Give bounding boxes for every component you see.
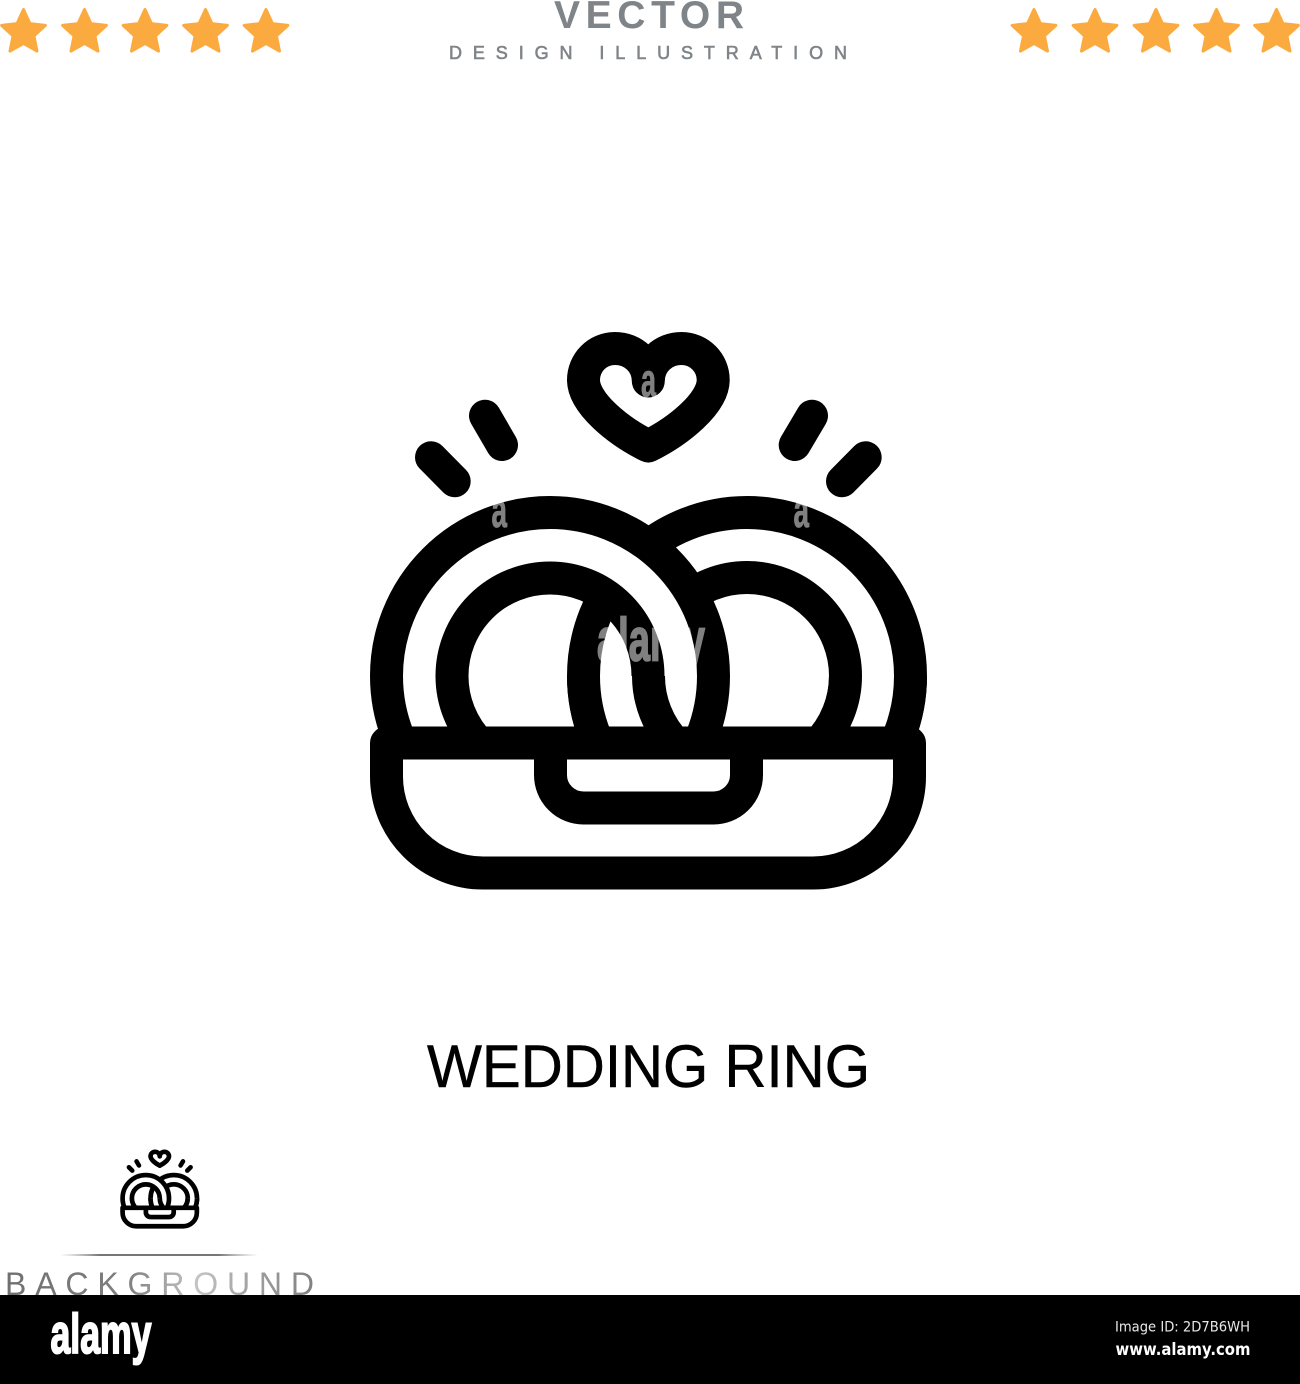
footer text: image id: Image ID: 2D7B6WH <box>1115 1320 1250 1336</box>
divider line above background label <box>60 1254 258 1256</box>
label: background: BACKGROUND <box>5 1266 314 1302</box>
left rating stars <box>2 10 288 51</box>
watermark: alamy over icon: a <box>641 354 656 406</box>
small icon: wedding rings thumbnail <box>123 1152 197 1226</box>
icon: box clasp <box>550 743 746 808</box>
icon: sparkle lines <box>431 416 866 481</box>
watermark: alamy over icon <box>492 354 809 674</box>
subheading: design illustration: DESIGN ILLUSTRATION <box>449 43 847 63</box>
watermark: alamy over icon: alamy <box>597 606 705 674</box>
icon: heart <box>584 348 713 446</box>
icon: interlocked rings <box>370 496 927 730</box>
watermark: alamy over icon: a <box>794 484 809 538</box>
footer text: website: www.alamy.com <box>1116 1340 1250 1360</box>
right rating stars <box>1012 10 1298 51</box>
title: wedding ring: WEDDING RING <box>427 1033 870 1100</box>
watermark: alamy over icon: a <box>492 484 507 538</box>
icon: ring box base <box>386 743 910 873</box>
footer band <box>0 1295 1300 1384</box>
main icon: wedding rings in a box <box>386 348 910 873</box>
footer logo: alamy: alamy <box>50 1302 152 1365</box>
